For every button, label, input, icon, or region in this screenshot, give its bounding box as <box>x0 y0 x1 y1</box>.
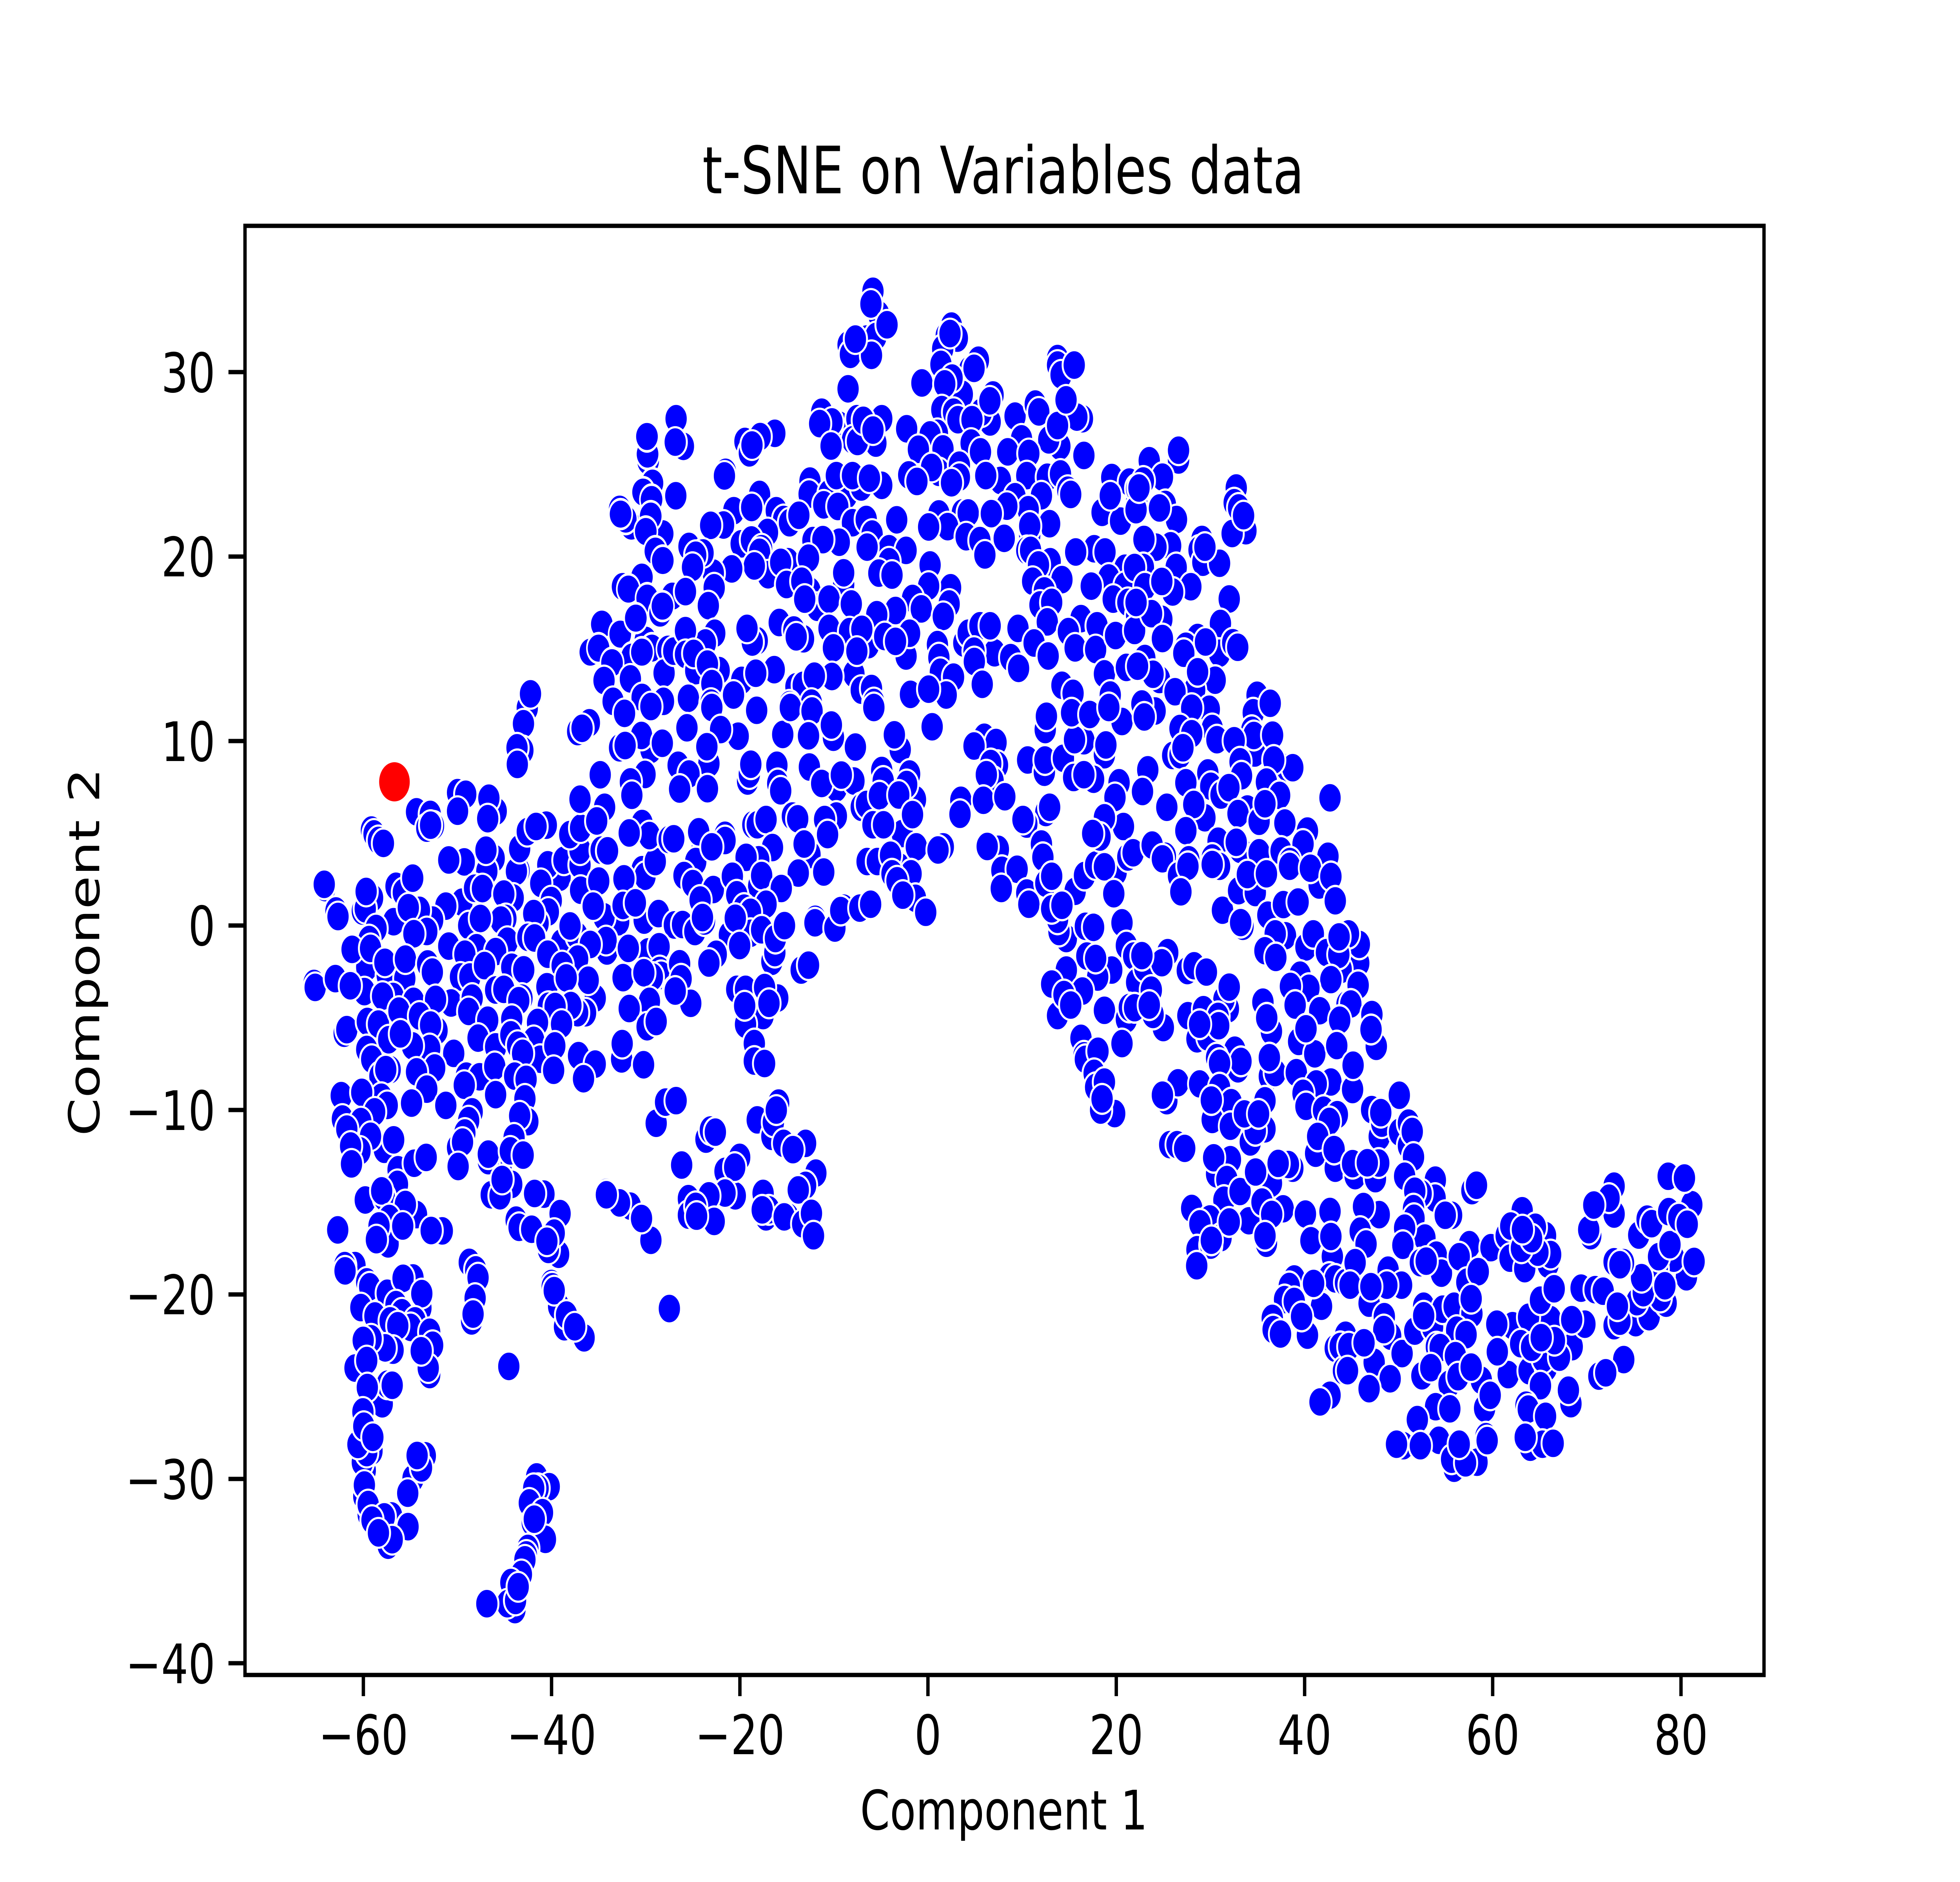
title: t-SNE on Variables data <box>702 133 1304 209</box>
points: lower right tail <box>1336 1050 1706 1483</box>
y axis ticks and labels: −10 <box>125 1080 215 1143</box>
points: top centre <box>662 276 1148 719</box>
points: right descending band <box>1123 844 1388 1417</box>
y axis ticks and labels: −40 <box>125 1633 215 1696</box>
x axis ticks and labels <box>318 1675 1708 1767</box>
highlighted red point <box>379 762 410 801</box>
y axis ticks and labels <box>125 342 245 1696</box>
x axis ticks and labels: −40 <box>507 1704 597 1767</box>
y axis ticks and labels: −20 <box>125 1264 215 1327</box>
y axis ticks and labels: 10 <box>161 711 215 774</box>
plot frame <box>245 226 1764 1675</box>
points: lower left strands <box>326 1164 681 1624</box>
x axis ticks and labels: −60 <box>318 1704 408 1767</box>
y axis ticks and labels: 20 <box>161 526 215 589</box>
x axis ticks and labels: 80 <box>1654 1704 1708 1767</box>
x axis label: Component 1 <box>860 1779 1148 1842</box>
points: upper left arm <box>579 421 684 678</box>
points: upper right shoulder <box>1122 435 1342 876</box>
x axis ticks and labels: 60 <box>1466 1704 1520 1767</box>
x axis ticks and labels: 0 <box>915 1704 942 1767</box>
y axis label: Component 2 <box>60 768 109 1136</box>
y axis ticks and labels: 30 <box>161 342 215 405</box>
x axis ticks and labels: −20 <box>695 1704 785 1767</box>
points: centre band <box>662 692 1148 1251</box>
scatter plot points <box>302 276 1706 1624</box>
points: left cluster <box>302 658 693 1187</box>
x axis ticks and labels: 20 <box>1089 1704 1143 1767</box>
y axis ticks and labels: −30 <box>125 1449 215 1512</box>
x axis ticks and labels: 40 <box>1278 1704 1332 1767</box>
y axis ticks and labels: 0 <box>188 895 215 958</box>
